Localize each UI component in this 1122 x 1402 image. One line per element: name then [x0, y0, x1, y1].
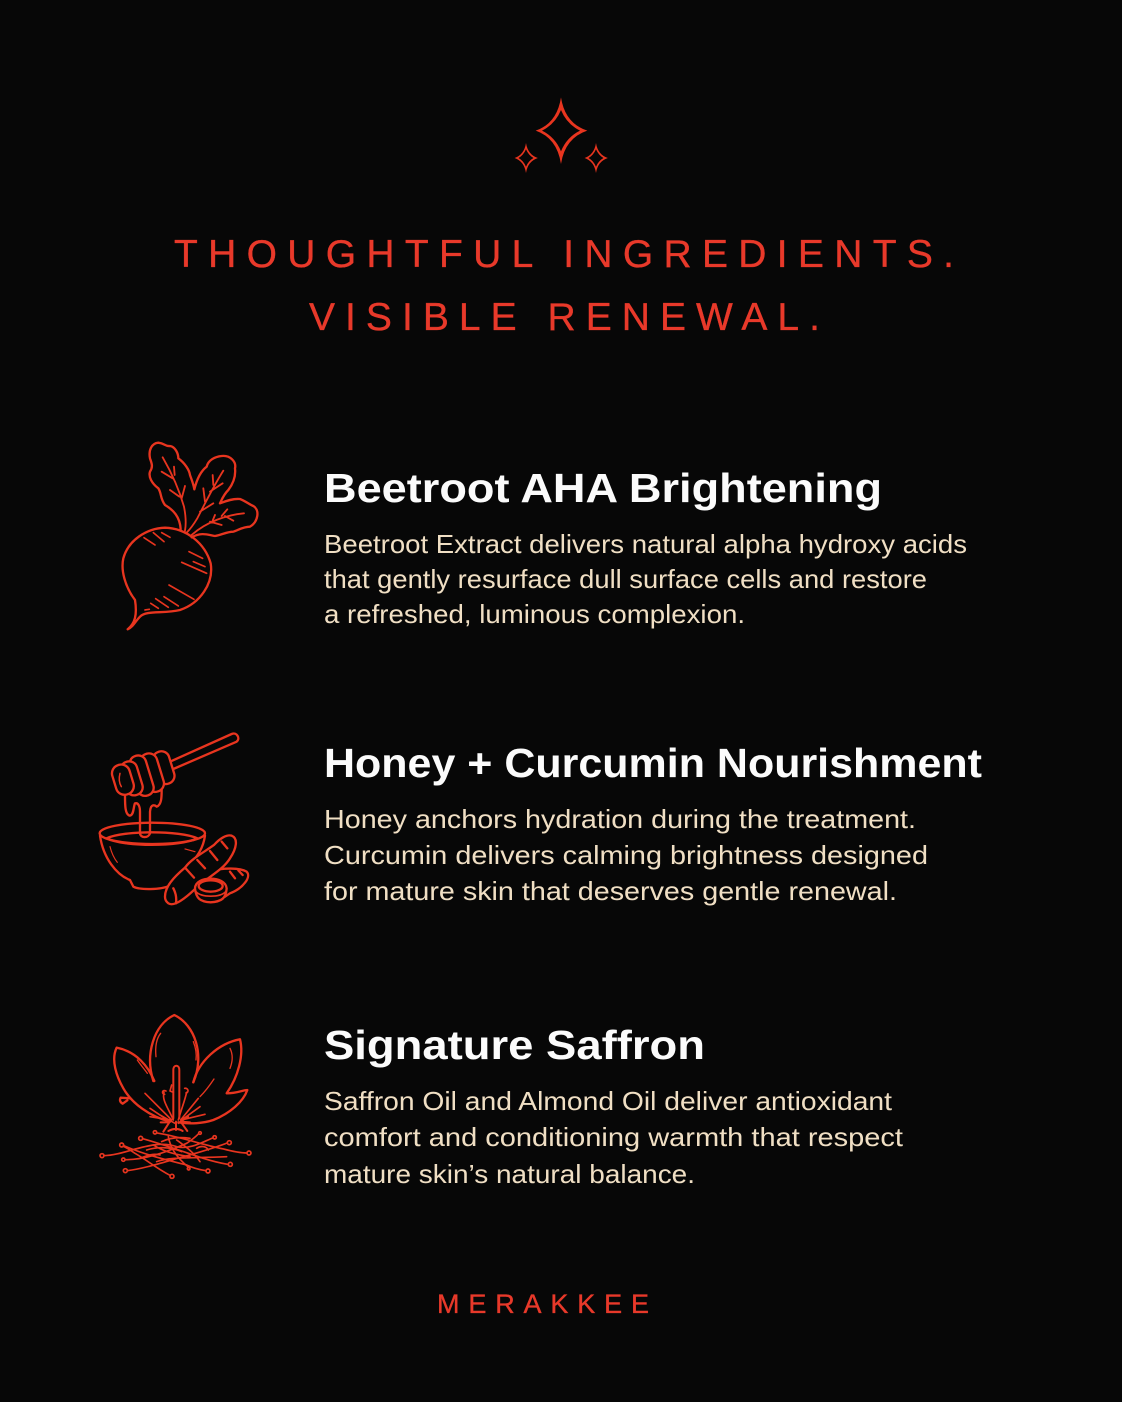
panel: beetroot — [123, 443, 967, 629]
heading: Beetroot AHA Brightening — [324, 465, 882, 511]
panel: honey and curcumin — [100, 734, 982, 906]
text block — [324, 1086, 904, 1189]
text block: comfort and conditioning warmth that respect — [324, 1122, 904, 1152]
brand name: MERAKKEE — [437, 1289, 649, 1319]
icon: sparkles — [515, 97, 608, 173]
title: THOUGHTFUL INGREDIENTS. — [174, 233, 954, 276]
text block: Saffron Oil and Almond Oil deliver antioxidant — [324, 1086, 893, 1116]
text block: that gently resurface dull surface cells and restore — [324, 564, 927, 594]
text block: Curcumin delivers calming brightness designed — [324, 840, 928, 870]
title — [174, 233, 954, 339]
text block: a refreshed, luminous complexion. — [324, 599, 745, 629]
icon: beetroot — [123, 443, 257, 629]
panel: saffron — [100, 1015, 904, 1189]
heading: Honey + Curcumin Nourishment — [324, 740, 982, 786]
text block — [324, 529, 967, 629]
title: VISIBLE RENEWAL. — [309, 296, 820, 339]
text block: Beetroot Extract delivers natural alpha hydroxy acids — [324, 529, 967, 559]
icon: honey dipper, bowl and turmeric — [100, 734, 248, 904]
icon: saffron flower — [100, 1015, 251, 1178]
text block — [324, 804, 928, 906]
text block: for mature skin that deserves gentle renewal. — [324, 876, 897, 906]
text block: mature skin’s natural balance. — [324, 1159, 695, 1189]
heading: Signature Saffron — [324, 1022, 705, 1068]
text block: Honey anchors hydration during the treatment. — [324, 804, 916, 834]
